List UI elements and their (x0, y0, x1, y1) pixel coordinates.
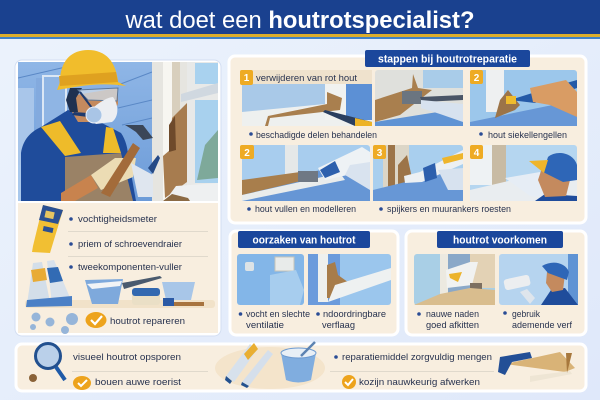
step 4 image (470, 145, 577, 201)
cause captions: ventilatie (246, 320, 284, 331)
step badges (240, 70, 483, 159)
icon: rot specks (30, 312, 78, 334)
icon: tubes and bucket (215, 342, 325, 389)
image: sealing seams (414, 254, 495, 305)
step badges: 4 (474, 148, 480, 159)
neck and face (70, 88, 118, 122)
tip: mix and finish: kozijn nauwkeurig afwerken (359, 377, 480, 388)
cause captions: verflaag (322, 320, 355, 331)
icon: caulking gun and spatula (498, 352, 575, 382)
step label (240, 70, 372, 85)
step 2 filling image (242, 145, 370, 201)
tool list (68, 214, 208, 273)
tools panel (18, 203, 218, 334)
illustration: specialist at rotten window (18, 50, 218, 201)
icon: magnifier (29, 344, 65, 382)
heading (437, 231, 563, 248)
cause captions: vocht en slechte (246, 309, 310, 320)
panel: repair steps (229, 50, 586, 223)
step label: 1 (244, 73, 250, 84)
tool list: priem of schroevendraier (78, 239, 182, 250)
worker (21, 110, 136, 201)
header banner (0, 0, 600, 39)
heading: oorzaken van houtrot (252, 234, 356, 246)
image: painter with roller (499, 254, 578, 305)
step badges: 3 (377, 148, 383, 159)
heading tab: stappen bij houtrotreparatie (378, 54, 517, 66)
prevention captions: ademende verf (512, 320, 572, 331)
step caption row 1: beschadigde delen behandelen (256, 130, 377, 141)
image: rotten window frame (308, 254, 391, 305)
step 1 image (240, 70, 372, 126)
panel: bottom tips (16, 342, 586, 391)
hard hat (57, 50, 126, 90)
prevention captions: nauwe naden (426, 309, 479, 320)
prevention captions: goed afkitten (426, 320, 479, 331)
prevention captions (417, 309, 572, 331)
step caption row 2 left: hout vullen en modelleren (255, 204, 356, 215)
image: damp tiles with vent (237, 254, 304, 305)
step badges: 2 (474, 73, 480, 84)
tool list: tweekomponenten-vuller (78, 262, 182, 273)
step badges: 2 (244, 148, 250, 159)
cause captions (239, 309, 386, 331)
panel: prevention (406, 231, 586, 335)
tip: mix and finish (330, 352, 494, 389)
icon: moisture meter (32, 205, 63, 253)
tip: visual inspection: visueel houtrot opsporen (73, 352, 181, 363)
check: bouwen: bouen auwe roerist (95, 377, 181, 388)
panel: specialist and tools (15, 50, 221, 336)
tip: visual inspection (72, 352, 208, 372)
step 2 image (470, 70, 577, 126)
icon: filler tubes and mixing tools (25, 260, 215, 308)
check: bouwen (73, 376, 181, 390)
cause captions: ndoordringbare (323, 309, 386, 320)
step label: verwijderen van rot hout (256, 73, 357, 84)
heading tab (365, 50, 530, 67)
step caption row 2 right: spijkers en muurankers roesten (387, 204, 511, 215)
prevention captions: gebruik (512, 309, 540, 320)
panel: causes (230, 231, 398, 335)
tip: mix and finish: reparatiemiddel zorgvuldig mengen (342, 352, 492, 363)
heading (238, 231, 370, 248)
check: houtrot repareren: houtrot repareren (110, 316, 185, 327)
step caption row 1 right: hout siekellengellen (488, 130, 567, 141)
title: wat doet een houtrotspecialist? (125, 7, 475, 34)
tool list: vochtigheidsmeter (78, 214, 157, 225)
heading: houtrot voorkomen (453, 234, 547, 246)
step 1b image (375, 70, 463, 126)
check: houtrot repareren (86, 312, 185, 328)
step 3 image (373, 145, 463, 201)
